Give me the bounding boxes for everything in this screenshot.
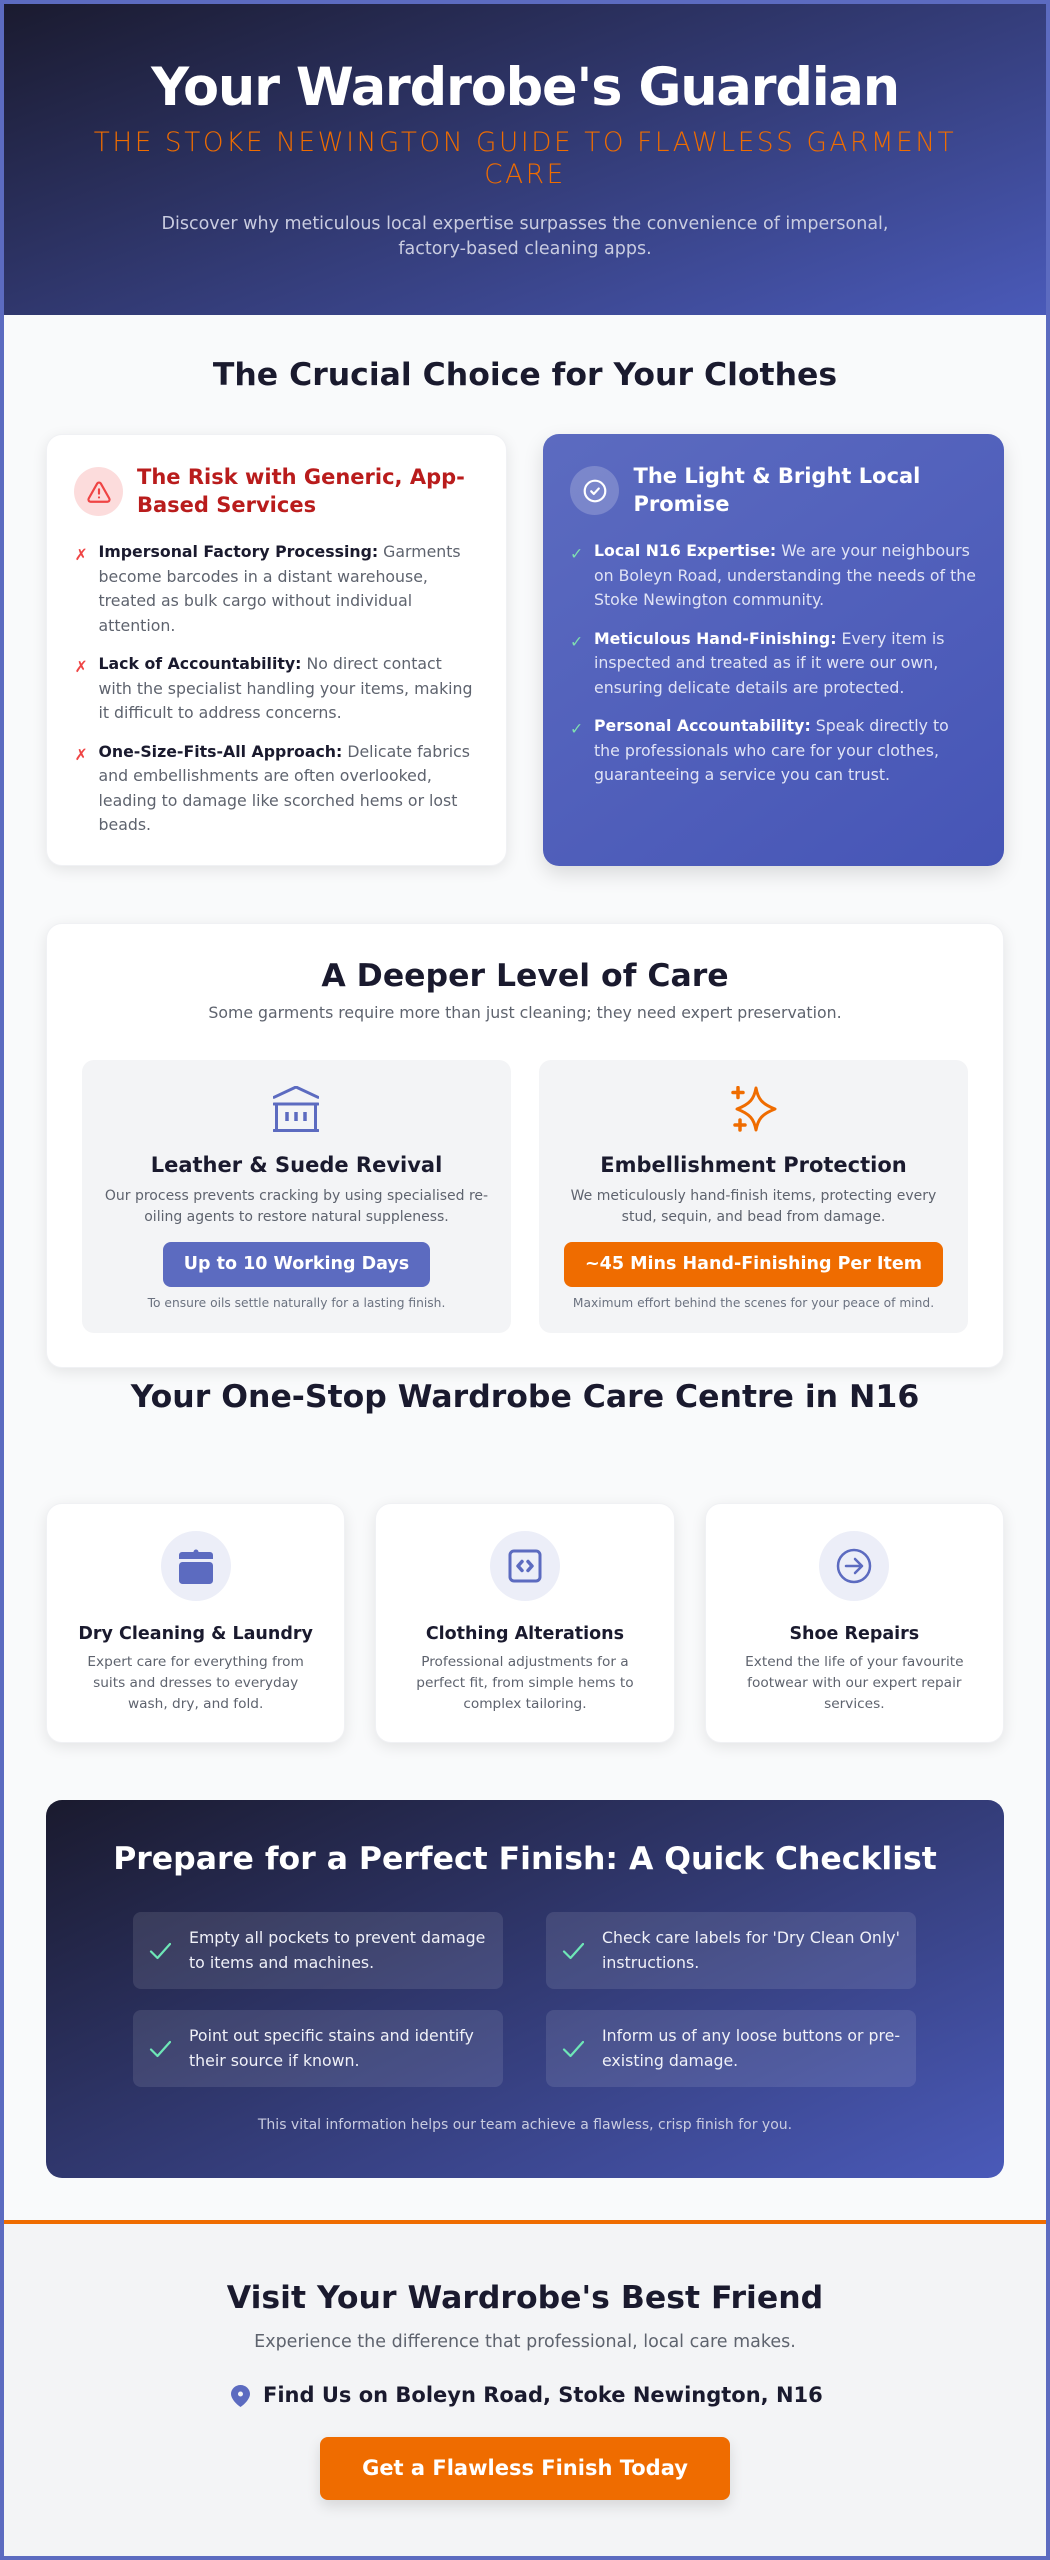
icon: check circle: [570, 466, 619, 515]
card note: To ensure oils settle naturally for a lasting finish.: [148, 1296, 445, 1310]
call to action button: [320, 2437, 730, 2500]
card text: [87, 1654, 304, 1712]
panel intro: Some garments require more than just cleaning; they need expert preservation.: [208, 1003, 842, 1022]
panel heading: Prepare for a Perfect Finish: A Quick Checklist: [113, 1841, 937, 1877]
list item: [570, 628, 944, 696]
icon: sparkles: [731, 1086, 776, 1132]
list item: with the specialist handling your items, making: [98, 678, 473, 698]
icon: map pin: [231, 2385, 250, 2407]
card: leather and suede: [82, 1060, 511, 1333]
card text: [416, 1654, 634, 1712]
card title: Embellishment Protection: [600, 1152, 907, 1176]
list item: treated as bulk cargo without individual: [98, 591, 412, 610]
card title: Leather & Suede Revival: [151, 1152, 442, 1176]
checklist item: Inform us of any loose buttons or pre-: [602, 2026, 900, 2045]
list item: become barcodes in a distant warehouse,: [98, 566, 428, 586]
intro text: [162, 214, 888, 258]
card: embellishment protection: [539, 1060, 968, 1333]
intro text: factory-based cleaning apps.: [398, 238, 652, 258]
card text: stud, sequin, and bead from damage.: [622, 1208, 885, 1224]
list item: and embellishments are often overlooked,: [98, 766, 432, 785]
list item: [74, 742, 470, 834]
card text: services.: [824, 1696, 885, 1712]
badge: ~45 Mins Hand-Finishing Per Item: [585, 1254, 922, 1274]
badge: [163, 1242, 430, 1287]
call to action button: Get a Flawless Finish Today: [362, 2456, 688, 2480]
panel heading: The Risk with Generic, App-: [137, 465, 465, 489]
list item: Lack of Accountability: No direct contact: [98, 654, 442, 673]
list item: beads.: [98, 815, 151, 834]
checklist item: instructions.: [602, 1952, 699, 1972]
list item: on Boleyn Road, understanding the needs of the: [594, 566, 976, 584]
subtitle: THE STOKE NEWINGTON GUIDE TO FLAWLESS GARMENT: [94, 128, 956, 158]
footer text: Experience the difference that professional, local care makes.: [254, 2332, 796, 2352]
list item: [570, 716, 949, 784]
icon: building: [273, 1086, 319, 1132]
panel heading: Based Services: [137, 493, 316, 517]
checklist item: [546, 1912, 916, 1989]
checklist item: existing damage.: [602, 2050, 738, 2070]
badge: Up to 10 Working Days: [184, 1254, 409, 1274]
panel heading: [634, 464, 920, 516]
list item: ensuring delicate details are protected.: [594, 678, 904, 696]
subtitle: CARE: [484, 160, 566, 190]
list item: guaranteeing a service you can trust.: [594, 765, 890, 784]
service card: dry cleaning: [46, 1503, 345, 1743]
checklist item: to items and machines.: [189, 1952, 374, 1972]
list item: Local N16 Expertise: We are your neighbours: [594, 541, 970, 560]
panel: light and bright local promise: [542, 434, 1004, 866]
card text: Extend the life of your favourite: [745, 1654, 964, 1670]
service card: shoe repairs: [705, 1503, 1004, 1743]
list item: Personal Accountability: Speak directly to: [594, 716, 949, 735]
card text: We meticulously hand-finish items, protecting every: [571, 1188, 936, 1204]
card text: wash, dry, and fold.: [128, 1696, 263, 1712]
list item: inspected and treated as if it were our own,: [594, 653, 938, 672]
card title: Shoe Repairs: [789, 1624, 919, 1644]
card text: oiling agents to restore natural suppleness.: [144, 1208, 449, 1224]
card title: Clothing Alterations: [426, 1624, 624, 1644]
list item: the professionals who care for your clothes,: [594, 740, 939, 760]
card text: [571, 1188, 936, 1224]
list item: leading to damage like scorched hems or lost: [98, 790, 457, 810]
icon: basket: [161, 1531, 231, 1601]
list item: [570, 541, 976, 609]
subtitle: [94, 128, 956, 190]
checklist item: their source if known.: [189, 2050, 360, 2070]
checklist item: [133, 1912, 503, 1989]
footer: [0, 2220, 1050, 2560]
card text: complex tailoring.: [463, 1696, 587, 1712]
list item: [74, 654, 473, 722]
card text: footwear with our expert repair: [747, 1675, 962, 1691]
heading: the crucial choice: The Crucial Choice for Your Clothes: [213, 357, 837, 393]
list item: [74, 542, 461, 634]
checklist note: This vital information helps our team achieve a flawless, crisp finish for you.: [258, 2117, 792, 2133]
panel: light and bright local promise: ✓: [570, 719, 583, 738]
panel: risk with generic services: ✗: [74, 657, 88, 676]
address text: Find Us on Boleyn Road, Stoke Newington, N16: [263, 2383, 823, 2407]
card text: Expert care for everything from: [87, 1654, 304, 1670]
list item: One-Size-Fits-All Approach: Delicate fabrics: [98, 742, 470, 760]
card text: [105, 1188, 488, 1224]
panel: risk with generic services: ✗: [74, 545, 88, 564]
list item: Meticulous Hand-Finishing: Every item is: [594, 628, 944, 648]
checklist item: Check care labels for 'Dry Clean Only': [602, 1928, 900, 1947]
card text: perfect fit, from simple hems to: [416, 1675, 634, 1691]
icon: arrow circle: [819, 1531, 889, 1601]
panel: light and bright local promise: ✓: [570, 544, 583, 563]
card text: suits and dresses to everyday: [93, 1675, 298, 1691]
intro text: Discover why meticulous local expertise surpasses the convenience of impersonal,: [162, 214, 888, 234]
badge: [564, 1242, 943, 1287]
panel: risk with generic services: ✗: [74, 744, 88, 764]
icon: warning: [74, 467, 123, 516]
card title: Dry Cleaning & Laundry: [78, 1624, 313, 1644]
card text: Professional adjustments for a: [421, 1654, 629, 1670]
list item: Stoke Newington community.: [594, 590, 824, 609]
checklist item: [133, 2010, 503, 2087]
card text: Our process prevents cracking by using specialised re-: [105, 1188, 488, 1204]
list item: it difficult to address concerns.: [98, 703, 342, 722]
checklist item: [546, 2010, 916, 2087]
panel: checklist: [46, 1800, 1004, 2178]
panel: a deeper level of care: [46, 923, 1004, 1368]
panel: risk with generic services: [46, 434, 507, 866]
list item: Impersonal Factory Processing: Garments: [98, 542, 461, 561]
panel: light and bright local promise: ✓: [570, 632, 583, 650]
checklist item: Empty all pockets to prevent damage: [189, 1928, 485, 1947]
card text: [745, 1654, 964, 1712]
service card: alterations: [375, 1503, 675, 1743]
panel heading: [137, 465, 465, 517]
header banner: [0, 0, 1050, 315]
footer heading: Visit Your Wardrobe's Best Friend: [227, 2280, 823, 2316]
icon: code square: [490, 1531, 560, 1601]
address: [231, 2383, 823, 2407]
title: Your Wardrobe's Guardian: [151, 56, 899, 118]
panel heading: A Deeper Level of Care: [321, 958, 729, 994]
checklist item: Point out specific stains and identify: [189, 2026, 474, 2045]
panel heading: The Light & Bright Local: [634, 464, 920, 488]
list item: attention.: [98, 616, 175, 634]
panel heading: Promise: [634, 492, 730, 516]
heading: one-stop care centre: Your One-Stop Wardrobe Care Centre in N16: [131, 1379, 919, 1415]
card note: Maximum effort behind the scenes for your peace of mind.: [573, 1296, 934, 1310]
